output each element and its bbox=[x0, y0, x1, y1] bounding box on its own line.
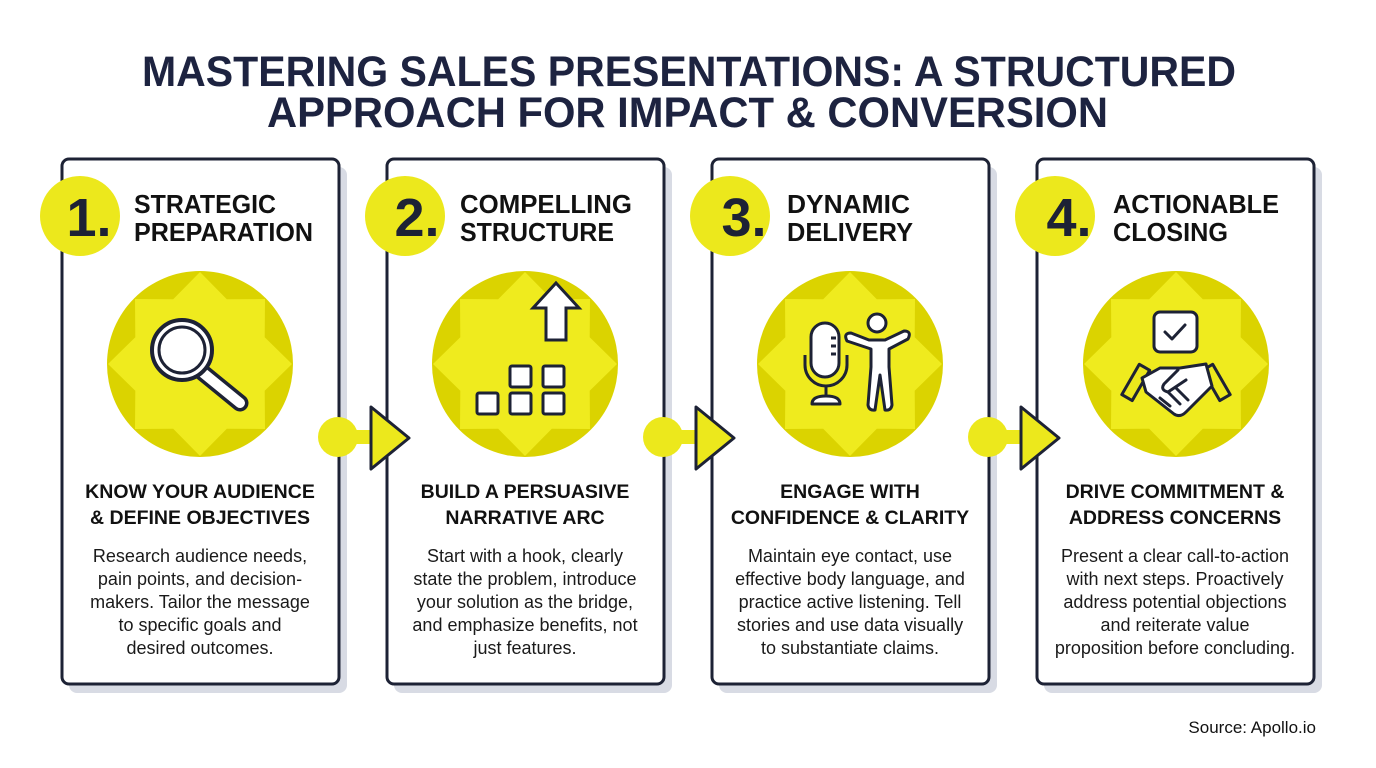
panel: strategic preparation bbox=[40, 159, 347, 693]
body 1: desired outcomes. bbox=[126, 638, 274, 658]
body 2 bbox=[412, 546, 638, 658]
badge 4 bbox=[1015, 176, 1095, 256]
heading 1: STRATEGIC bbox=[134, 189, 276, 219]
arrow 1 bbox=[318, 407, 409, 469]
icon: handshake with checkbox bbox=[1083, 271, 1269, 457]
subheading 2 bbox=[421, 481, 629, 529]
subheading 2: NARRATIVE ARC bbox=[445, 507, 605, 529]
body 2: Start with a hook, clearly bbox=[427, 546, 623, 566]
body 1: pain points, and decision- bbox=[98, 569, 302, 589]
body 4 bbox=[1055, 546, 1295, 658]
panel: actionable closing bbox=[1015, 159, 1322, 693]
subheading 1: & DEFINE OBJECTIVES bbox=[90, 507, 310, 529]
badge 4: 4. bbox=[1046, 188, 1092, 248]
body 3: Maintain eye contact, use bbox=[748, 546, 952, 566]
badge 1: 1. bbox=[66, 188, 112, 248]
subheading 2: BUILD A PERSUASIVE bbox=[421, 481, 629, 503]
heading 2: STRUCTURE bbox=[460, 217, 614, 247]
body 1: Research audience needs, bbox=[93, 546, 307, 566]
title: MASTERING SALES PRESENTATIONS: A STRUCTURED bbox=[142, 48, 1236, 96]
body 3: stories and use data visually bbox=[737, 615, 963, 635]
body 2: your solution as the bridge, bbox=[417, 592, 633, 612]
subheading 1: KNOW YOUR AUDIENCE bbox=[85, 481, 315, 503]
badge 2: 2. bbox=[394, 188, 440, 248]
badge 1 bbox=[40, 176, 120, 256]
heading 4: CLOSING bbox=[1113, 217, 1228, 247]
badge 3 bbox=[690, 176, 770, 256]
arrow 3 bbox=[968, 407, 1059, 469]
arrow 2 bbox=[643, 407, 734, 469]
heading 1: PREPARATION bbox=[134, 217, 313, 247]
subheading 3: ENGAGE WITH bbox=[780, 481, 920, 503]
heading 2 bbox=[460, 189, 632, 247]
badge 3: 3. bbox=[721, 188, 767, 248]
title: APPROACH FOR IMPACT & CONVERSION bbox=[267, 89, 1108, 137]
body 3: to substantiate claims. bbox=[761, 638, 939, 658]
panel: dynamic delivery bbox=[690, 159, 997, 693]
icon: growth blocks bbox=[432, 271, 618, 457]
body 3: effective body language, and bbox=[735, 569, 965, 589]
subheading 3 bbox=[731, 481, 969, 529]
badge 2 bbox=[365, 176, 445, 256]
source note: Source: Apollo.io bbox=[1188, 718, 1316, 737]
heading 3: DELIVERY bbox=[787, 217, 913, 247]
panel: compelling structure bbox=[365, 159, 672, 693]
icon: mic and person bbox=[757, 271, 943, 457]
body 1: makers. Tailor the message bbox=[90, 592, 310, 612]
heading 3 bbox=[787, 189, 913, 247]
heading 4: ACTIONABLE bbox=[1113, 189, 1279, 219]
body 3 bbox=[735, 546, 965, 658]
body 2: and emphasize benefits, not bbox=[412, 615, 638, 635]
body 2: just features. bbox=[472, 638, 577, 658]
subheading 4: DRIVE COMMITMENT & bbox=[1066, 481, 1284, 503]
body 1: to specific goals and bbox=[118, 615, 282, 635]
body 4: with next steps. Proactively bbox=[1065, 569, 1284, 589]
body 2: state the problem, introduce bbox=[413, 569, 637, 589]
title bbox=[142, 48, 1236, 137]
body 4: proposition before concluding. bbox=[1055, 638, 1295, 658]
subheading 4 bbox=[1066, 481, 1284, 529]
heading 3: DYNAMIC bbox=[787, 189, 910, 219]
heading 4 bbox=[1113, 189, 1279, 247]
body 1 bbox=[90, 546, 310, 658]
body 3: practice active listening. Tell bbox=[739, 592, 961, 612]
heading 2: COMPELLING bbox=[460, 189, 632, 219]
body 4: address potential objections bbox=[1063, 592, 1287, 612]
heading 1 bbox=[134, 189, 313, 247]
subheading 1 bbox=[85, 481, 315, 529]
body 4: Present a clear call-to-action bbox=[1061, 546, 1289, 566]
subheading 3: CONFIDENCE & CLARITY bbox=[731, 507, 969, 529]
subheading 4: ADDRESS CONCERNS bbox=[1069, 507, 1281, 529]
icon: magnifier bbox=[107, 271, 293, 457]
body 4: and reiterate value bbox=[1100, 615, 1250, 635]
